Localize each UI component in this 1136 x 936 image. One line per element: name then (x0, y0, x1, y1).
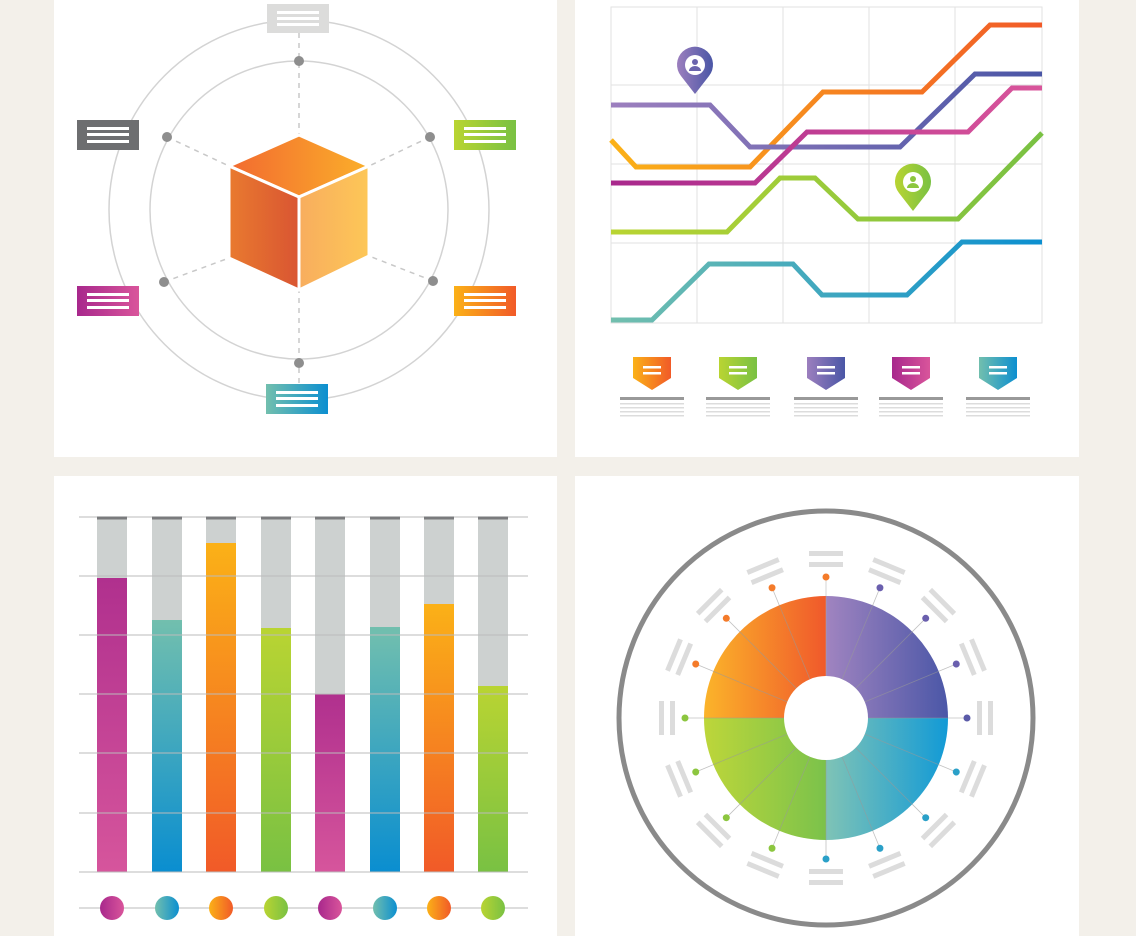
icon: pin purple (677, 47, 713, 94)
icon: cube (229, 135, 369, 290)
spokes and dots (682, 574, 970, 862)
panel: donut chart (575, 476, 1079, 936)
donut (704, 596, 948, 840)
icon: pin green (895, 164, 931, 211)
panel: bar chart (54, 476, 557, 936)
panel: cube diagram (54, 0, 557, 457)
legend (620, 357, 1030, 416)
bars (97, 517, 508, 872)
chart lines (611, 25, 1042, 320)
legend circles (100, 896, 505, 920)
label boxes (77, 4, 516, 414)
panel: line chart (575, 0, 1079, 457)
label bars (659, 551, 993, 885)
